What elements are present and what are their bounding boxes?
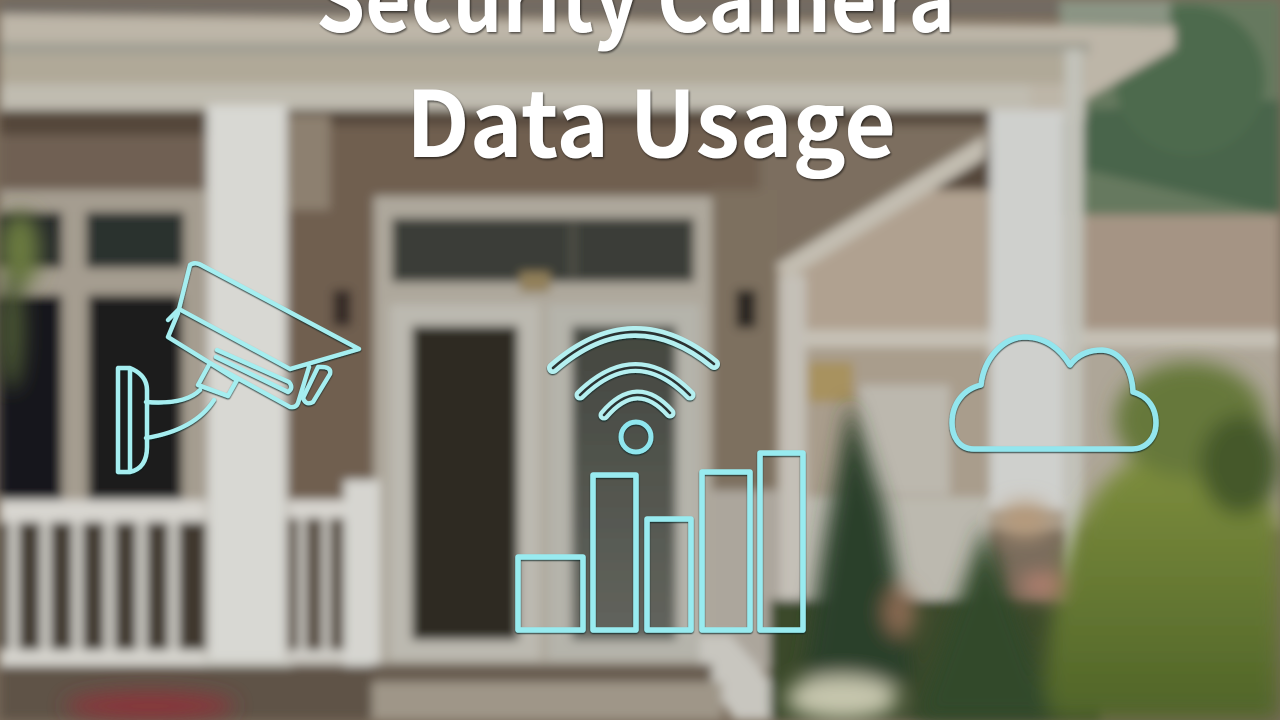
left window [0, 190, 206, 510]
title [316, 0, 955, 184]
wifi dot [621, 422, 651, 452]
porch wall [0, 110, 990, 670]
trees top right [1060, 0, 1280, 215]
wifi arcs [553, 332, 714, 415]
title line 2: Data Usage [406, 52, 896, 184]
roof fascia and porch ceiling [0, 0, 1175, 120]
bar chart [518, 453, 803, 630]
porch lights [236, 229, 756, 328]
railing [0, 480, 990, 720]
house wall and siding on right [760, 130, 1280, 695]
door frame [374, 196, 712, 666]
icon: security camera [118, 263, 359, 472]
icon: cloud [952, 337, 1156, 449]
bushes and shrubs [0, 212, 1280, 720]
icon: wifi signal [553, 332, 714, 452]
ground and steps [0, 600, 1100, 720]
porch columns [200, 50, 1083, 686]
